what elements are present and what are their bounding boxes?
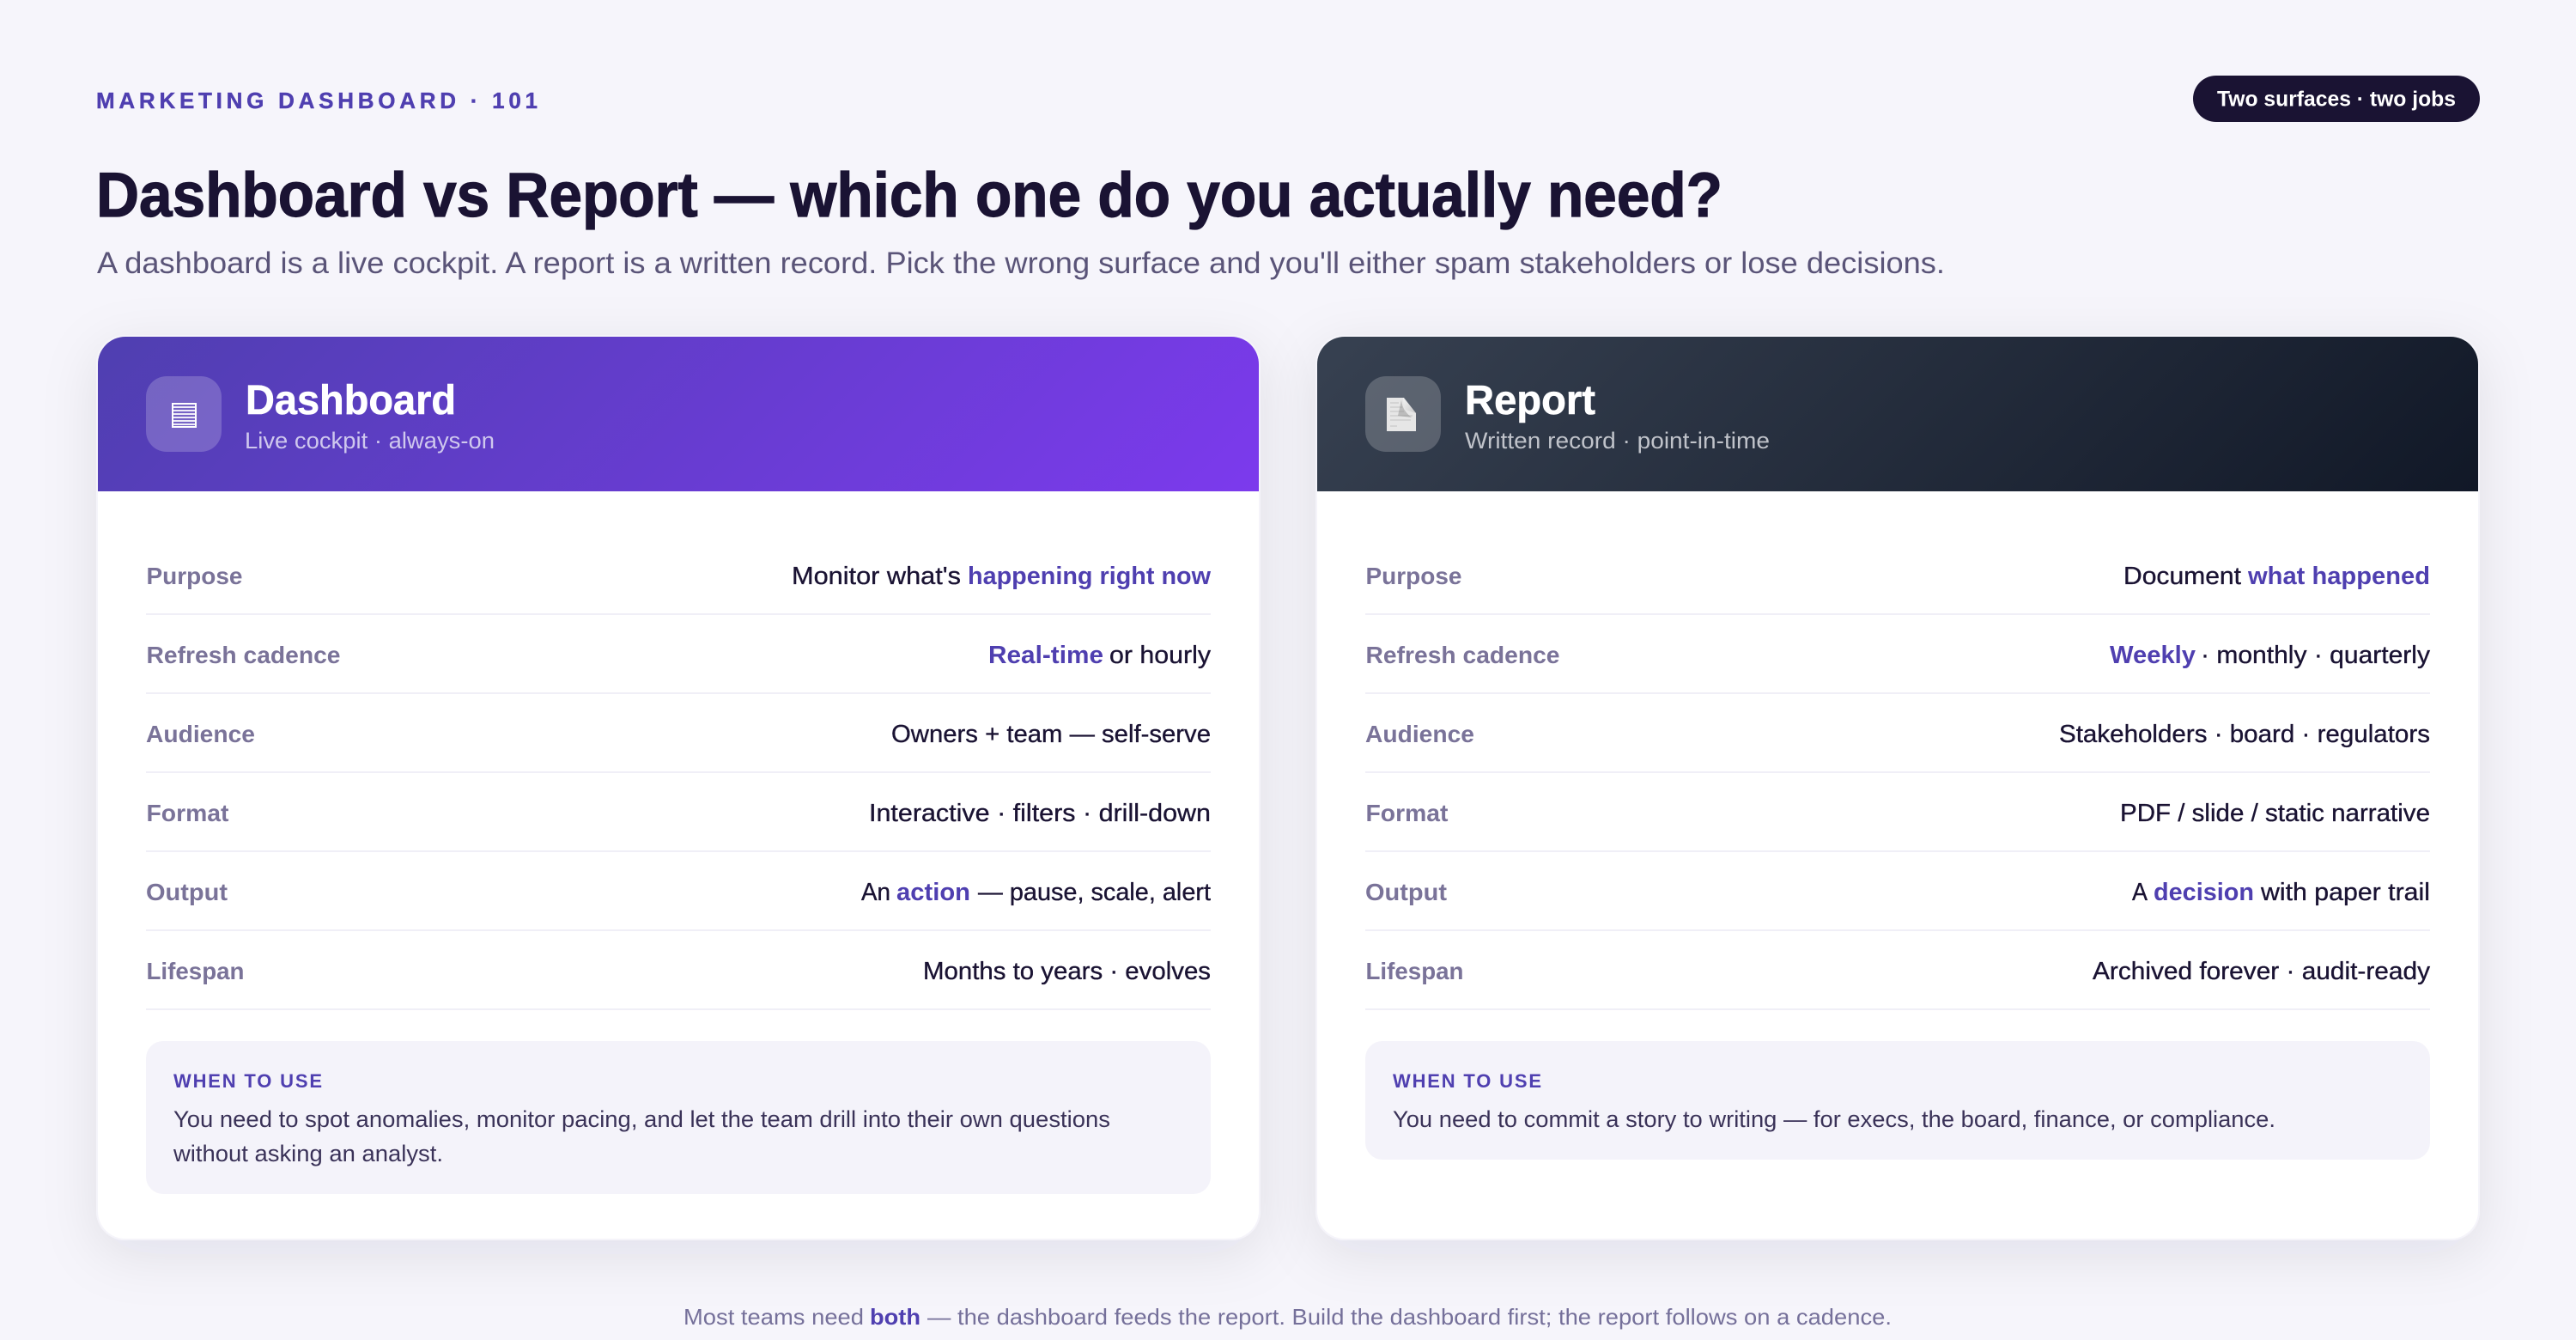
- report subheading: Written record · point-in-time: [1465, 428, 1770, 454]
- value: [2110, 642, 2431, 669]
- callout: when to use: [1365, 1041, 2430, 1160]
- label: Refresh cadence: [1365, 642, 1559, 668]
- label: Output: [146, 879, 228, 905]
- callout: when to use: [146, 1041, 1211, 1194]
- row: format: [146, 800, 1211, 827]
- label: Refresh cadence: [146, 642, 340, 668]
- row: purpose: [1365, 563, 2430, 590]
- label: Lifespan: [1365, 958, 1463, 984]
- eyebrow: MARKETING DASHBOARD · 101: [96, 88, 538, 113]
- report header band: [1317, 337, 2478, 491]
- row: lifespan: [1365, 958, 2431, 985]
- badge: two surfaces: Two surfaces · two jobs: [2217, 88, 2456, 112]
- value: [2123, 563, 2430, 590]
- panel: report: [1315, 335, 2480, 1240]
- row: refresh cadence: [1365, 642, 2431, 669]
- dashboard subheading: Live cockpit · always-on: [245, 428, 495, 454]
- value: or hourly: [1109, 642, 1212, 669]
- label: Audience: [1365, 721, 1474, 747]
- title: Dashboard vs Report — which one do you actually need?: [96, 161, 1722, 230]
- value: action: [896, 879, 970, 906]
- dashboard header band: [98, 337, 1259, 491]
- label: Output: [1365, 879, 1447, 905]
- value: happening right now: [968, 563, 1211, 590]
- value: A: [2132, 879, 2148, 906]
- value: what happened: [2247, 563, 2430, 590]
- panel: dashboard: [96, 335, 1261, 1240]
- value: Document: [2123, 563, 2241, 590]
- value: decision: [2154, 879, 2254, 906]
- value: Monitor what's: [792, 563, 961, 590]
- row: purpose: [146, 563, 1211, 590]
- value: Stakeholders · board · regulators: [2059, 721, 2430, 748]
- callout label: WHEN TO USE: [1393, 1070, 1541, 1092]
- value: Interactive · filters · drill-down: [869, 800, 1211, 827]
- row: lifespan: [146, 958, 1211, 985]
- callout text: without asking an analyst.: [173, 1141, 443, 1166]
- value: with paper trail: [2260, 879, 2430, 906]
- icon: dashboard: [146, 376, 222, 452]
- callout label: WHEN TO USE: [173, 1070, 322, 1092]
- value: Real-time: [988, 642, 1103, 669]
- value: Archived forever · audit-ready: [2093, 958, 2431, 985]
- value: Weekly: [2110, 642, 2196, 669]
- row: output: [1365, 879, 2430, 906]
- row: refresh cadence: [146, 642, 1212, 669]
- value: [988, 642, 1212, 669]
- value: — pause, scale, alert: [978, 879, 1211, 906]
- report heading: Report: [1465, 378, 1595, 423]
- icon: report document: [1365, 376, 1441, 452]
- label: Format: [146, 800, 228, 826]
- value: [2132, 879, 2430, 906]
- footer note: Most teams need: [683, 1304, 864, 1330]
- label: Audience: [146, 721, 255, 747]
- row: format: [1365, 800, 2430, 827]
- callout text: You need to commit a story to writing — for execs, the board, finance, or compliance.: [1393, 1106, 2275, 1132]
- value: Owners + team — self-serve: [891, 721, 1211, 748]
- value: [861, 879, 1211, 906]
- value: An: [861, 879, 890, 906]
- value: Months to years · evolves: [923, 958, 1211, 985]
- value: PDF / slide / static narrative: [2120, 800, 2430, 827]
- row: audience: [1365, 721, 2430, 748]
- value: [792, 563, 1211, 590]
- row: audience: [146, 721, 1211, 748]
- callout text: [173, 1106, 1110, 1166]
- label: Format: [1365, 800, 1448, 826]
- subtitle: A dashboard is a live cockpit. A report is a written record. Pick the wrong surface and you'll either spam stakeholders or lose decisions.: [97, 247, 1945, 280]
- value: · monthly · quarterly: [2201, 642, 2431, 669]
- label: Purpose: [146, 563, 242, 589]
- footer note: — the dashboard feeds the report. Build the dashboard first; the report follows on a cadence.: [927, 1304, 1892, 1330]
- dashboard heading: Dashboard: [246, 378, 456, 423]
- row: output: [146, 879, 1211, 906]
- label: Lifespan: [146, 958, 244, 984]
- callout text: You need to spot anomalies, monitor pacing, and let the team drill into their own questions: [173, 1106, 1110, 1132]
- footer note: both: [870, 1304, 920, 1330]
- badge: two surfaces: [2193, 76, 2480, 122]
- label: Purpose: [1365, 563, 1461, 589]
